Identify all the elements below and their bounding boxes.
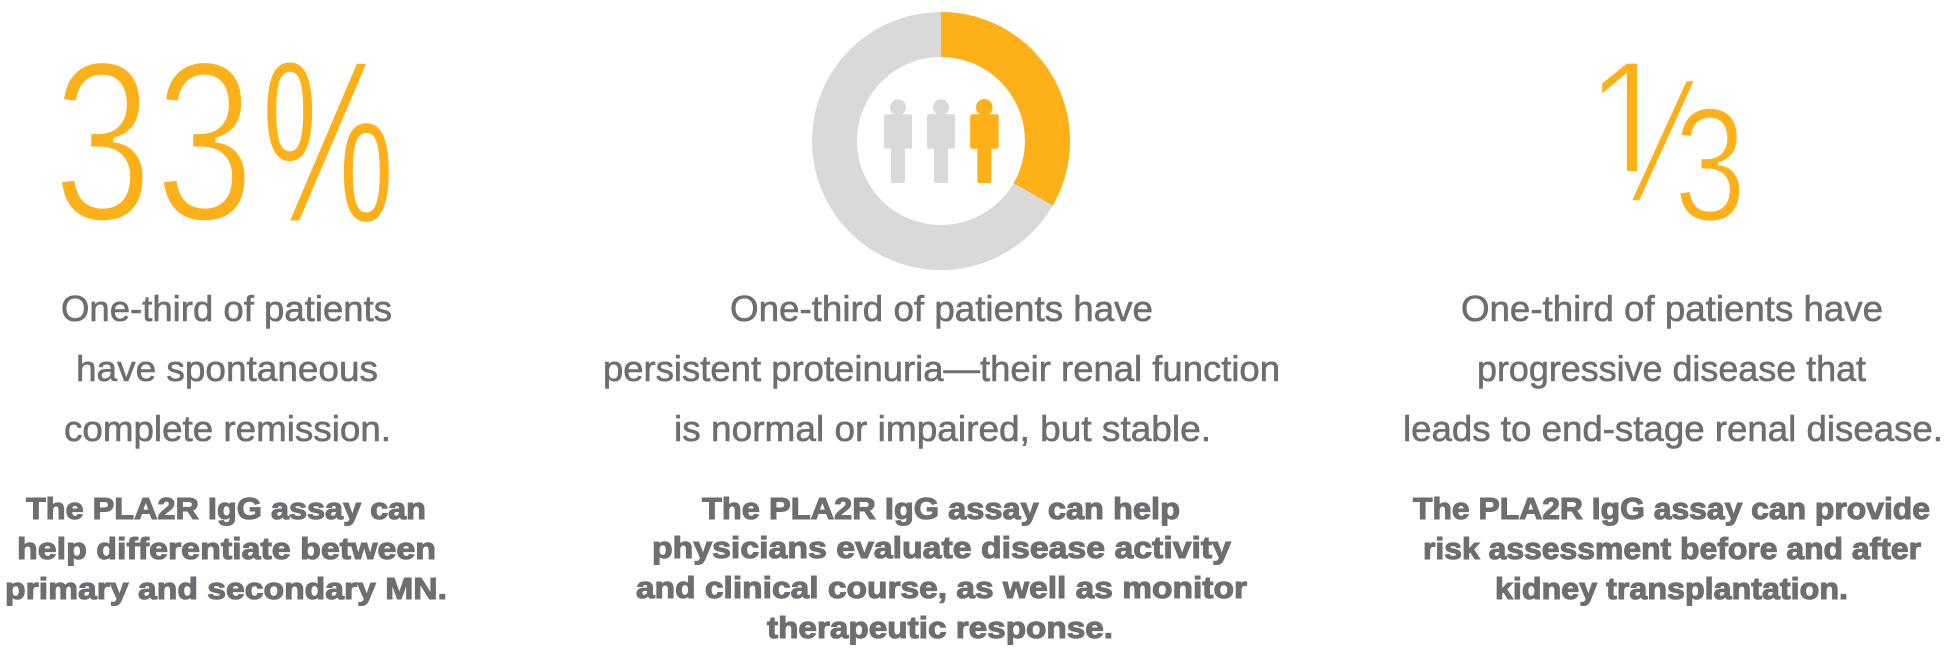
icon: three people, one highlighted — [884, 99, 999, 183]
text: progressive disease description — [1403, 288, 1943, 449]
text: proteinuria description — [603, 288, 1280, 449]
icon: grey person left — [884, 99, 912, 183]
text: assay provides risk assessment: risk assessment before and after — [1423, 531, 1921, 566]
big number: 33%: 3 — [53, 13, 152, 270]
text: remission description — [61, 288, 392, 449]
panel: progressive disease — [1403, 21, 1943, 606]
panel: persistent proteinuria — [603, 12, 1280, 645]
text: assay provides risk assessment: kidney transplantation. — [1495, 571, 1848, 606]
text: assay evaluates disease activity: The PLA2R IgG assay can help — [702, 491, 1180, 526]
text: assay evaluates disease activity: therapeutic response. — [767, 610, 1113, 645]
text: progressive disease description: leads to end-stage renal disease. — [1403, 408, 1943, 449]
text: assay provides risk assessment — [1413, 491, 1930, 606]
icon: grey person middle — [927, 99, 955, 183]
text: assay evaluates disease activity — [636, 491, 1247, 645]
donut chart: one-third highlighted — [834, 12, 1070, 248]
big number: one third — [1602, 64, 1740, 221]
text: assay differentiates MN: primary and secondary MN. — [5, 571, 447, 606]
big number: one third: / — [1621, 51, 1703, 236]
text: remission description: complete remission. — [64, 408, 391, 449]
big number: one third: 1 — [1585, 21, 1673, 230]
text: progressive disease description: progressive disease that — [1477, 348, 1866, 389]
text: assay differentiates MN: The PLA2R IgG assay can — [26, 491, 426, 526]
big number: 33% — [53, 13, 395, 272]
big number: 33%: 3 — [155, 13, 254, 270]
text: remission description: have spontaneous — [76, 348, 378, 389]
text: assay evaluates disease activity: physicians evaluate disease activity — [652, 530, 1232, 565]
panel: spontaneous remission — [5, 13, 447, 606]
text: assay differentiates MN: help differentiate between — [17, 531, 436, 566]
text: progressive disease description: One-third of patients have — [1461, 288, 1883, 329]
icon: orange person right — [970, 99, 999, 183]
text: proteinuria description: One-third of patients have — [730, 288, 1153, 329]
big number: one third: 3 — [1674, 75, 1746, 256]
text: assay evaluates disease activity: and clinical course, as well as monitor — [636, 570, 1247, 605]
text: assay differentiates MN — [5, 491, 447, 606]
text: assay provides risk assessment: The PLA2R IgG assay can provide — [1413, 491, 1930, 526]
text: proteinuria description: is normal or impaired, but stable. — [674, 408, 1211, 449]
text: proteinuria description: persistent proteinuria—their renal function — [603, 348, 1280, 389]
big number: 33%: % — [261, 13, 395, 272]
text: remission description: One-third of patients — [61, 288, 392, 329]
